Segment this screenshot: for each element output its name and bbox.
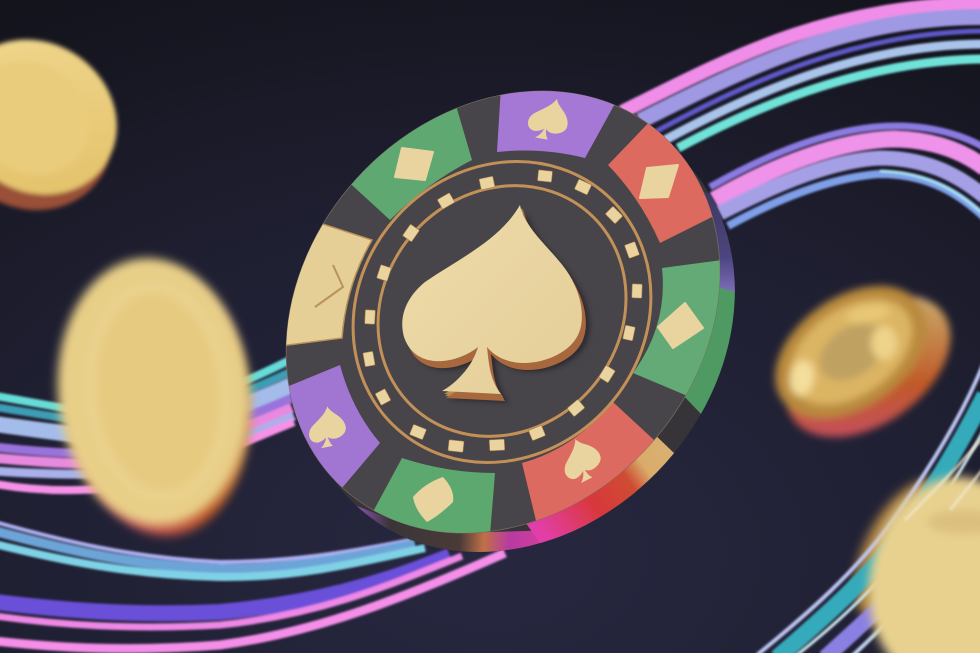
suit: diamond cream left [315,265,343,307]
coin relief [83,283,233,501]
chip body [336,168,735,552]
inner ring [327,135,677,487]
edge: lilac sheen [704,192,735,292]
center spade extrusion [404,208,586,401]
suit: spade top [526,96,571,142]
ring squares [363,170,642,452]
suit: diamond red top [640,165,678,198]
suit: spade bottom [553,432,608,488]
chip face [197,3,809,621]
poker chip [286,90,735,552]
segment: green top left [352,108,472,220]
ribbon: bottom left cyan [0,522,425,577]
suit: spade left [303,403,349,451]
edge: bottom colour reflections [356,506,592,552]
ribbon: bottom right [757,360,980,653]
suit: diamond green right [658,303,703,348]
suit: diamond green top [395,148,433,180]
segment: purple left [289,365,380,488]
edge: green side [685,288,735,414]
suit: leaf green bottom [413,477,453,522]
ribbon: middle right [710,126,980,226]
ribbon: top right [622,4,980,148]
segment: red bottom [522,402,654,521]
segment: red top right [608,124,712,243]
ribbon: bottom left purple [0,553,505,649]
coin: right [751,259,977,466]
coin: bottom right [850,462,980,653]
edge: red side reflection [526,437,674,543]
segment: purple top [497,91,614,158]
segment: cream left [286,224,373,346]
chip segments [286,91,720,533]
ribbon: pale streaks over bottom right coin [905,435,980,520]
ribbon: left behind coin [0,360,294,490]
segment: green bottom [374,458,495,533]
center spade [402,205,582,394]
center spade shadow [410,214,590,403]
coin: top left [0,8,147,240]
outer ring [291,100,713,524]
coin face [47,250,259,534]
coin back rim [59,261,261,543]
coin: left [47,250,261,543]
segment: green right [633,260,720,396]
coin: bottom right back [833,462,977,638]
